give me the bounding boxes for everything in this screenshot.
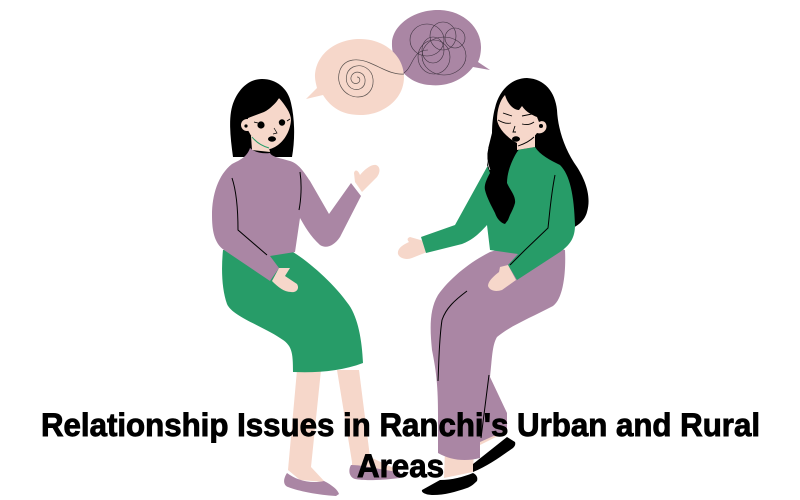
title: Areas: [357, 448, 444, 484]
green sweater: [421, 147, 575, 280]
neck: [517, 130, 535, 150]
eyes, nose, mouth: [252, 111, 290, 142]
skirt: [222, 250, 363, 372]
trouser lines: [438, 291, 489, 438]
hair highlight strand: [487, 148, 490, 170]
hair fringe: [248, 97, 284, 118]
front shoe: [284, 473, 339, 496]
figure: left woman: [212, 79, 400, 496]
left hand: [398, 237, 427, 259]
left feet: [470, 418, 506, 445]
trousers: [431, 240, 565, 460]
back shoe: [349, 465, 400, 480]
long hair back: [492, 78, 589, 230]
closed eyes, nose, mouth: [498, 113, 534, 146]
sweater: [212, 148, 361, 281]
sleeve line: [510, 175, 555, 265]
legs: [288, 370, 325, 482]
wavy hair front: [485, 110, 530, 224]
collar line: [252, 137, 269, 148]
speech bubble: spiral thoughts: [306, 39, 404, 115]
title: [41, 407, 760, 484]
speech bubble: tangled thoughts: [392, 10, 490, 85]
figure: right woman: [398, 78, 589, 495]
hand on lap: [272, 268, 298, 292]
raised hand: [354, 165, 380, 192]
hand on lap: [488, 265, 516, 291]
title: Relationship Issues in Ranchi's Urban and Rural: [41, 407, 760, 443]
neck and face: [251, 136, 270, 152]
back hair: [230, 79, 294, 157]
face: [497, 95, 547, 143]
front shoe: [422, 473, 477, 495]
sleeve lines: [232, 172, 301, 255]
back shoe: [473, 437, 515, 472]
